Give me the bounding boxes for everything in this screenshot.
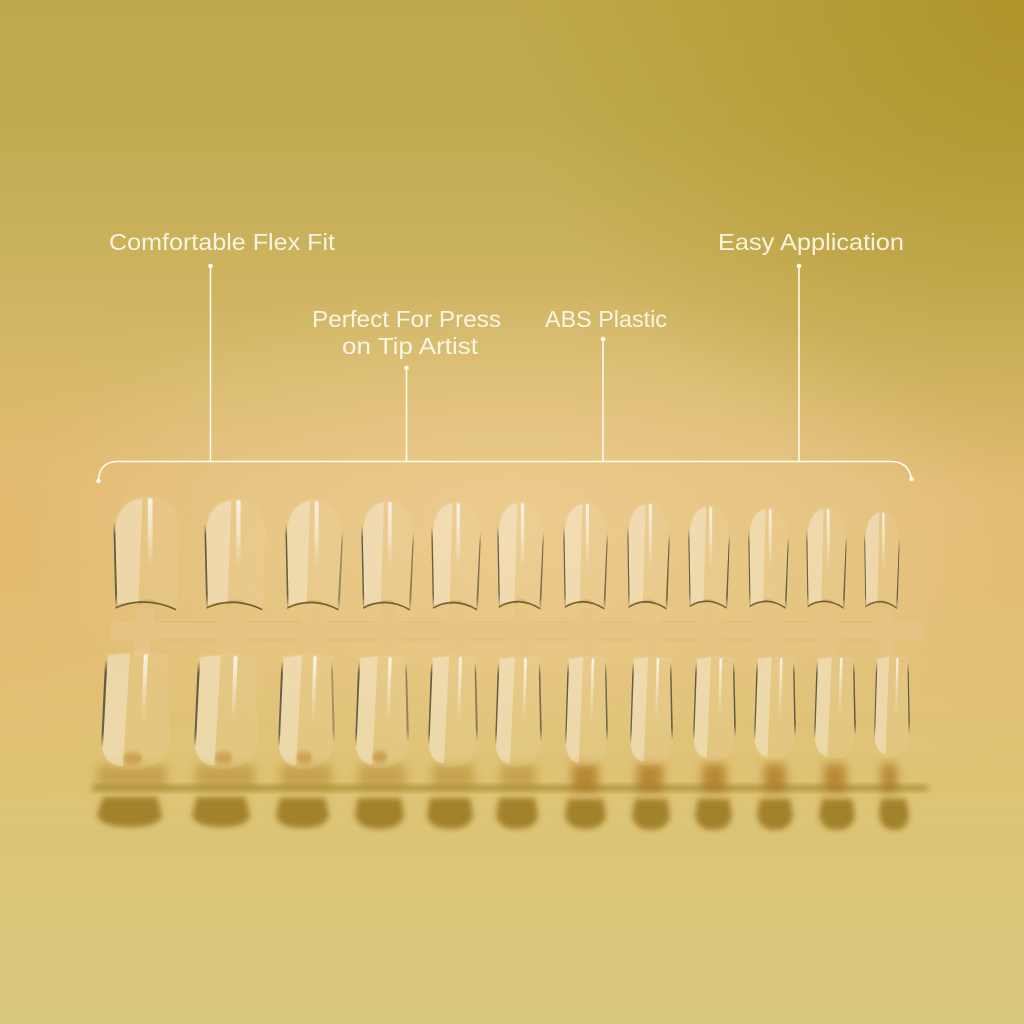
- upper stem shadows: [572, 764, 897, 792]
- nail bottom 12: [874, 656, 910, 757]
- nail top 10: [748, 507, 789, 609]
- callout: Comfortable Flex Fit: [109, 229, 335, 461]
- callout: Perfect For Press on Tip Artist: [312, 306, 501, 461]
- bracket connecting callouts to nails: [96, 462, 914, 483]
- carrier runner with stems: [110, 608, 924, 656]
- nail bottom 9: [693, 656, 736, 761]
- nail bottom 11: [814, 656, 856, 759]
- nail top 8: [627, 502, 670, 610]
- top row of nails: [113, 496, 900, 611]
- nail top 3: [285, 499, 343, 611]
- nail top 12: [864, 511, 900, 609]
- nail bottom 6: [495, 656, 542, 767]
- nail top 4: [361, 500, 414, 611]
- nail top 9: [688, 505, 730, 609]
- callout: Easy Application: [718, 229, 904, 461]
- nail top 6: [497, 501, 544, 610]
- nail bottom 2: [194, 654, 257, 769]
- cast shadows: [92, 764, 928, 830]
- runner shadow: [92, 785, 928, 791]
- nail top 7: [563, 502, 608, 610]
- nail bottom 1: [101, 652, 169, 770]
- callout: Easy Application: Easy Application: [718, 229, 904, 255]
- nail top 2: [204, 498, 266, 611]
- nail bottom 7: [565, 656, 608, 766]
- nail top 1: [113, 496, 180, 610]
- nail tip shadows: [97, 797, 909, 830]
- nail bottom 4: [355, 655, 409, 768]
- bottom row of nails: [101, 652, 910, 770]
- nail top 11: [806, 507, 847, 609]
- nail bottom 8: [630, 656, 673, 765]
- callout: ABS Plastic: [545, 306, 667, 461]
- nail bottom 10: [754, 656, 796, 760]
- callout: Comfortable Flex Fit: Comfortable Flex Fit: [109, 229, 335, 255]
- upper soft shadows: [97, 765, 536, 787]
- callout: ABS Plastic: ABS Plastic: [545, 306, 667, 332]
- callout: Perfect For Press on Tip Artist: Perfect For Press: [312, 306, 501, 332]
- nail bottom 3: [278, 654, 335, 769]
- nail bottom 5: [428, 655, 478, 767]
- nail top 5: [431, 501, 481, 611]
- callout: Perfect For Press on Tip Artist: on Tip Artist: [342, 333, 479, 359]
